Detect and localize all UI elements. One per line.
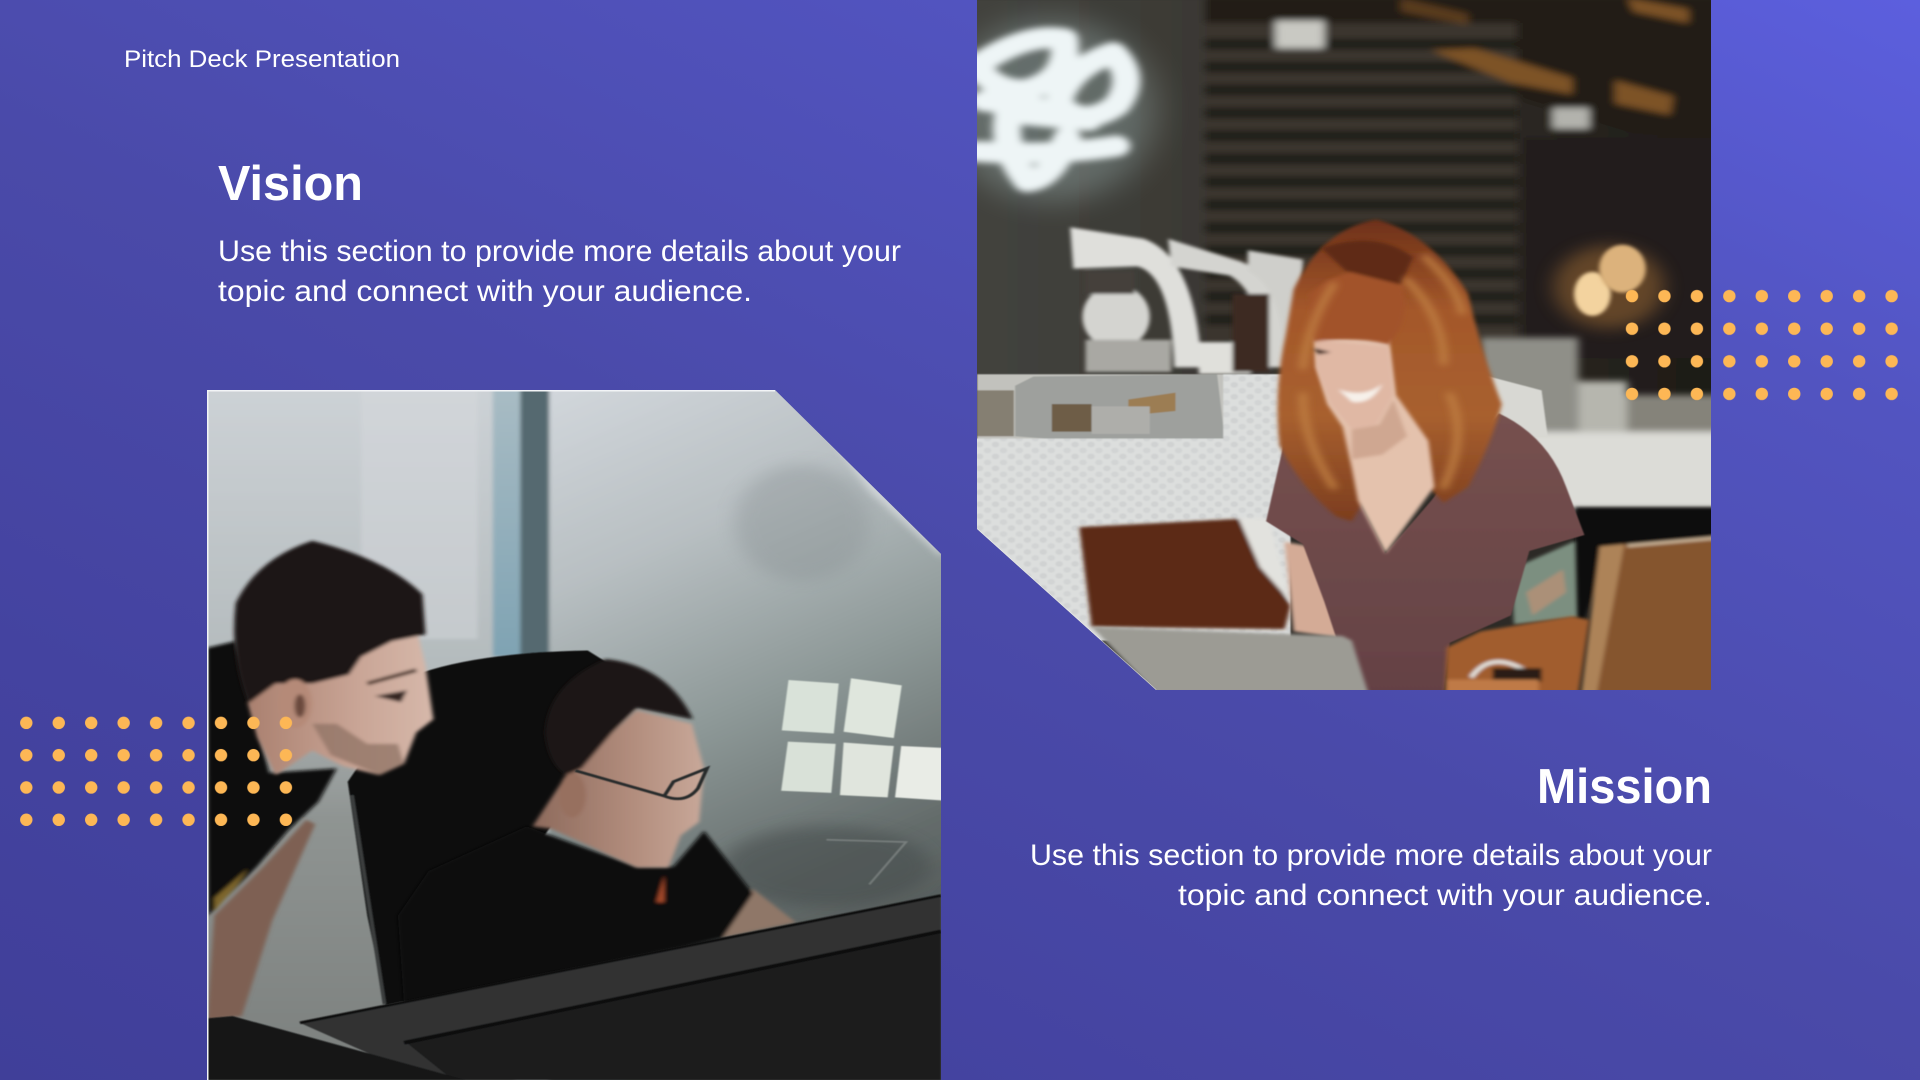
mission body text: Use this section to provide more details about your bbox=[1030, 839, 1712, 872]
woman's neck and chest bbox=[1314, 338, 1434, 553]
glassware and right counter bbox=[1480, 338, 1737, 510]
man 1 shirt and arm bbox=[207, 641, 337, 1021]
photo outline bbox=[208, 391, 775, 1080]
dot grid: upper right bbox=[1616, 280, 1908, 410]
vision body text bbox=[218, 235, 901, 308]
woman's face and fringe bbox=[1309, 241, 1413, 459]
laptop bbox=[1092, 627, 1368, 693]
vision body text: Use this section to provide more details about your bbox=[218, 235, 901, 268]
photo scene: cafe bbox=[948, 0, 1737, 693]
handbag bbox=[1445, 616, 1589, 693]
left counter bbox=[966, 374, 1548, 641]
chair and bag bbox=[1079, 507, 1731, 693]
man 1 head bbox=[234, 541, 433, 775]
mission heading: Mission bbox=[1537, 760, 1712, 814]
vision heading: Vision bbox=[218, 157, 363, 211]
lamps bbox=[1554, 245, 1664, 328]
mission body text: topic and connect with your audience. bbox=[1178, 879, 1712, 912]
woman's arms bbox=[1284, 541, 1577, 638]
sticky notes bbox=[781, 678, 943, 801]
man 2 body and arm bbox=[398, 826, 796, 1005]
photo cut edge bbox=[977, 529, 1156, 690]
neon sign bbox=[948, 18, 1156, 202]
chair bbox=[348, 651, 612, 1005]
mission body text bbox=[1030, 839, 1712, 912]
hair highlights bbox=[1303, 257, 1462, 487]
man 2 head bbox=[533, 659, 704, 867]
woman's shirt bbox=[1266, 413, 1584, 693]
photo scene: office bbox=[202, 384, 953, 1080]
espresso machines bbox=[1070, 227, 1303, 374]
vision body text: topic and connect with your audience. bbox=[218, 275, 752, 308]
glasses bbox=[575, 768, 707, 799]
header label: Pitch Deck Presentation bbox=[124, 46, 400, 73]
woman's hair bbox=[1278, 219, 1502, 521]
walls and ceiling bbox=[966, 0, 1737, 459]
dot grid: lower left bbox=[10, 707, 302, 836]
photo: woman at a cafe with a laptop bbox=[948, 0, 1737, 693]
photo: two men at a monitor bbox=[202, 384, 953, 1080]
monitor bbox=[207, 896, 941, 1080]
